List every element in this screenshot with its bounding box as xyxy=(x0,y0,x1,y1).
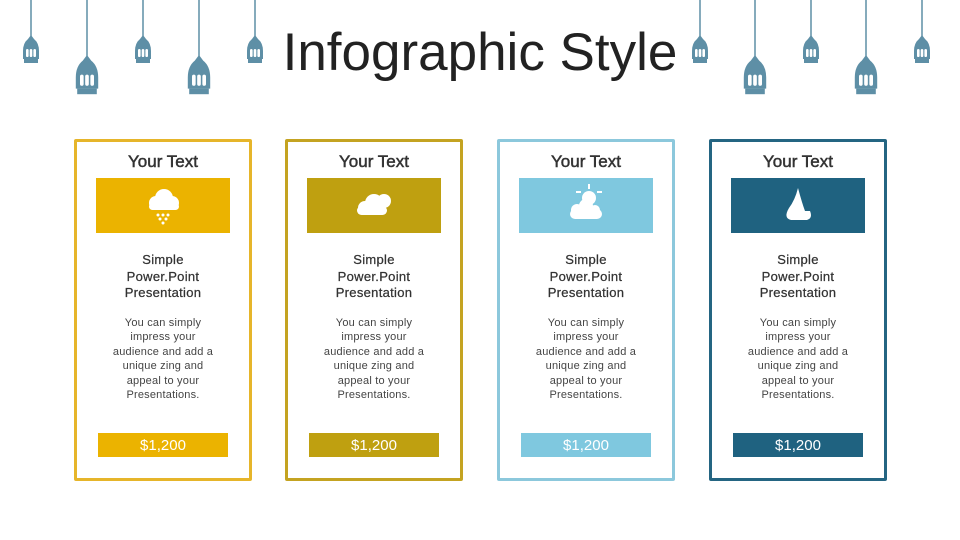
panel: card 2 xyxy=(285,139,463,481)
subtitle: Presentation xyxy=(548,285,624,300)
subtitle: Presentation xyxy=(125,285,201,300)
text: Presentations. xyxy=(337,389,411,401)
icon: rain cloud xyxy=(96,178,230,233)
text: impress your xyxy=(553,331,619,343)
text: unique zing and xyxy=(546,360,626,372)
subtitle xyxy=(548,252,624,300)
subtitle: Power.Point xyxy=(550,268,622,284)
text: appeal to your xyxy=(550,375,622,387)
text: impress your xyxy=(765,331,831,343)
text: appeal to your xyxy=(338,375,410,387)
text: audience and add a xyxy=(748,346,848,358)
price: $1,200 xyxy=(140,437,186,454)
price: $1,200 xyxy=(775,437,821,454)
heading: Your Text xyxy=(763,152,833,171)
text: Presentations. xyxy=(126,389,200,401)
icon: clouds xyxy=(307,178,441,233)
text: audience and add a xyxy=(536,346,636,358)
heading: Your Text xyxy=(128,152,198,171)
text: audience and add a xyxy=(324,346,424,358)
heading: Your Text xyxy=(551,152,621,171)
price xyxy=(733,433,863,457)
lanterns xyxy=(23,0,930,94)
text: unique zing and xyxy=(334,360,414,372)
icon: drop xyxy=(731,178,865,233)
subtitle: Simple xyxy=(565,252,607,267)
subtitle xyxy=(336,252,412,300)
text: Presentations. xyxy=(761,389,835,401)
panel: card 4 xyxy=(709,139,887,481)
text xyxy=(324,317,424,401)
subtitle xyxy=(760,252,836,300)
text: You can simply xyxy=(125,317,201,329)
title: Infographic Style xyxy=(283,23,677,82)
text xyxy=(748,317,848,401)
text: appeal to your xyxy=(762,375,834,387)
text: impress your xyxy=(341,331,407,343)
panel: card 3 xyxy=(497,139,675,481)
text: You can simply xyxy=(548,317,624,329)
subtitle: Power.Point xyxy=(338,268,410,284)
price xyxy=(98,433,228,457)
subtitle: Power.Point xyxy=(762,268,834,284)
subtitle xyxy=(125,252,201,300)
price xyxy=(521,433,651,457)
price: $1,200 xyxy=(351,437,397,454)
subtitle: Simple xyxy=(777,252,819,267)
subtitle: Power.Point xyxy=(127,268,199,284)
subtitle: Simple xyxy=(353,252,395,267)
icon: sun cloud xyxy=(519,178,653,233)
heading: Your Text xyxy=(339,152,409,171)
text: You can simply xyxy=(760,317,836,329)
text: impress your xyxy=(130,331,196,343)
text: unique zing and xyxy=(123,360,203,372)
text xyxy=(113,317,213,401)
price: $1,200 xyxy=(563,437,609,454)
text: Presentations. xyxy=(549,389,623,401)
price xyxy=(309,433,439,457)
subtitle: Presentation xyxy=(336,285,412,300)
subtitle: Presentation xyxy=(760,285,836,300)
text xyxy=(536,317,636,401)
text: You can simply xyxy=(336,317,412,329)
text: appeal to your xyxy=(127,375,199,387)
text: unique zing and xyxy=(758,360,838,372)
panel: card 1 xyxy=(74,139,252,481)
subtitle: Simple xyxy=(142,252,184,267)
text: audience and add a xyxy=(113,346,213,358)
